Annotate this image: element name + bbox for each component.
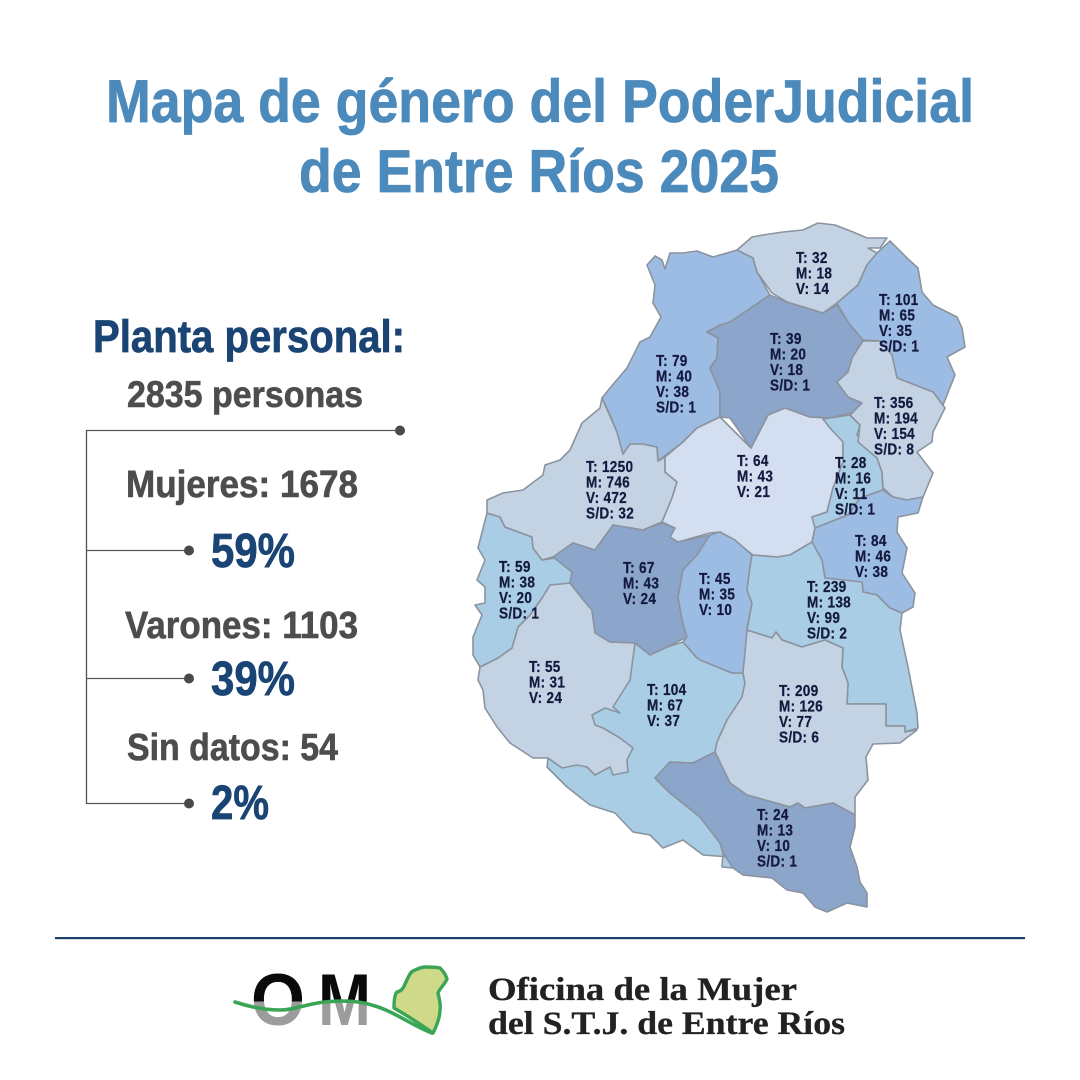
label: T 104: T: 104 bbox=[647, 682, 687, 699]
label: T 239: S/D: 2 bbox=[807, 626, 847, 643]
label: T 55: V: 24 bbox=[529, 690, 563, 707]
region: T 101 bbox=[837, 241, 965, 405]
label: T 209: V: 77 bbox=[779, 714, 812, 731]
label: T 1250: T: 1250 bbox=[586, 459, 633, 476]
footer logo: OM: O bbox=[251, 960, 305, 1041]
label: T 101: T: 101 bbox=[879, 292, 919, 309]
label: T 24: S/D: 1 bbox=[757, 854, 797, 871]
label: T 45: M: 35 bbox=[699, 587, 735, 604]
panel: planta personal bbox=[86, 311, 405, 830]
label: T 67: M: 43 bbox=[623, 576, 659, 593]
label: T 28: T: 28 bbox=[835, 455, 867, 472]
label: T 39: S/D: 1 bbox=[770, 378, 810, 395]
label: T 28: V: 11 bbox=[835, 486, 867, 503]
region: T 356 bbox=[837, 341, 945, 500]
label: T 67: T: 67 bbox=[623, 560, 655, 577]
region: T 104 bbox=[547, 642, 745, 868]
label: T 104: M: 67 bbox=[647, 698, 683, 715]
label: T 209: T: 209 bbox=[779, 683, 819, 700]
label: T 101: S/D: 1 bbox=[879, 339, 919, 356]
percent: varones: 39% bbox=[211, 653, 295, 706]
region: T 79 bbox=[602, 250, 770, 461]
region: T 55 bbox=[478, 583, 635, 775]
percent: sin datos: 2% bbox=[211, 777, 269, 830]
label: T 45: V: 10 bbox=[699, 602, 732, 619]
title: de Entre Ríos 2025 bbox=[299, 138, 779, 205]
region: T 67 bbox=[553, 523, 710, 655]
map: Entre Ríos departments bbox=[473, 223, 965, 912]
label: T 24: V: 10 bbox=[757, 838, 790, 855]
title: Mapa de género del PoderJudicial bbox=[106, 68, 974, 135]
label: T 59: T: 59 bbox=[499, 559, 531, 576]
label: T 104: V: 37 bbox=[647, 713, 680, 730]
label: T 32: T: 32 bbox=[796, 250, 828, 267]
label: T 356: T: 356 bbox=[874, 395, 914, 412]
label: T 39: M: 20 bbox=[770, 347, 806, 364]
region: T 59 bbox=[473, 513, 572, 667]
label: T 64: M: 43 bbox=[737, 469, 773, 486]
label: T 84: T: 84 bbox=[855, 533, 887, 550]
label: T 79: T: 79 bbox=[656, 353, 688, 370]
label: T 356: S/D: 8 bbox=[874, 442, 914, 459]
label: T 55: T: 55 bbox=[529, 659, 561, 676]
percent: mujeres: 59% bbox=[211, 525, 295, 578]
label: T 1250: M: 746 bbox=[586, 475, 630, 492]
label: T 79: S/D: 1 bbox=[656, 400, 696, 417]
icon: province outline bbox=[394, 967, 447, 1033]
total personas: 2835 personas bbox=[127, 374, 363, 415]
region: T 39 bbox=[707, 295, 863, 448]
label: T 101: V: 35 bbox=[879, 323, 912, 340]
map labels bbox=[499, 250, 919, 871]
label: T 32: M: 18 bbox=[796, 266, 832, 283]
region: T 84 bbox=[812, 490, 923, 613]
label: T 59: V: 20 bbox=[499, 590, 532, 607]
label: T 356: V: 154 bbox=[874, 426, 916, 443]
label: T 67: V: 24 bbox=[623, 591, 657, 608]
label: T 239: V: 99 bbox=[807, 610, 840, 627]
region: T 239 bbox=[747, 542, 918, 732]
label: T 356: M: 194 bbox=[874, 411, 919, 428]
label: T 101: M: 65 bbox=[879, 308, 915, 325]
label: T 28: S/D: 1 bbox=[835, 502, 875, 519]
connector lines bbox=[86, 426, 405, 808]
label: T 84: V: 38 bbox=[855, 564, 888, 581]
label: T 79: V: 38 bbox=[656, 384, 689, 401]
label: T 28: M: 16 bbox=[835, 471, 871, 488]
region: T 45 bbox=[678, 532, 752, 673]
label: T 24: M: 13 bbox=[757, 823, 793, 840]
label: T 239: M: 138 bbox=[807, 595, 851, 612]
label: T 45: T: 45 bbox=[699, 571, 731, 588]
label: T 59: S/D: 1 bbox=[499, 606, 539, 623]
label: T 1250: S/D: 32 bbox=[586, 506, 634, 523]
label: T 32: V: 14 bbox=[796, 281, 830, 298]
icon: green river curve bbox=[235, 1001, 432, 1033]
label: T 79: M: 40 bbox=[656, 369, 692, 386]
region: T 64 bbox=[662, 408, 843, 557]
footer text: Oficina de la Mujer bbox=[488, 972, 845, 1042]
footer logo: OM bbox=[235, 960, 447, 1041]
stat: varones: Varones: 1103 bbox=[125, 605, 358, 647]
region: T 209 bbox=[715, 630, 917, 815]
footer logo: OM: M bbox=[318, 960, 371, 1041]
stat: mujeres: Mujeres: 1678 bbox=[126, 464, 358, 506]
region: T 28 bbox=[812, 415, 883, 528]
region: T 32 bbox=[737, 223, 887, 313]
label: T 55: M: 31 bbox=[529, 675, 565, 692]
label: T 64: T: 64 bbox=[737, 453, 769, 470]
footer text: Oficina de la Mujer: del S.T.J. de Entre Ríos bbox=[488, 1006, 845, 1042]
label: T 39: V: 18 bbox=[770, 362, 803, 379]
label: T 209: M: 126 bbox=[779, 699, 823, 716]
label: T 84: M: 46 bbox=[855, 549, 891, 566]
footer text: Oficina de la Mujer: Oficina de la Mujer bbox=[488, 972, 797, 1008]
label: T 39: T: 39 bbox=[770, 331, 802, 348]
heading: planta personal: Planta personal: bbox=[93, 311, 405, 362]
label: T 59: M: 38 bbox=[499, 575, 535, 592]
label: T 24: T: 24 bbox=[757, 807, 789, 824]
label: T 64: V: 21 bbox=[737, 484, 770, 501]
title bbox=[106, 68, 974, 205]
stat: sin datos: Sin datos: 54 bbox=[127, 727, 338, 769]
label: T 209: S/D: 6 bbox=[779, 730, 819, 747]
label: T 1250: V: 472 bbox=[586, 490, 627, 507]
label: T 239: T: 239 bbox=[807, 579, 847, 596]
region: T 24 bbox=[655, 752, 867, 912]
region: T 1250 bbox=[487, 398, 677, 560]
